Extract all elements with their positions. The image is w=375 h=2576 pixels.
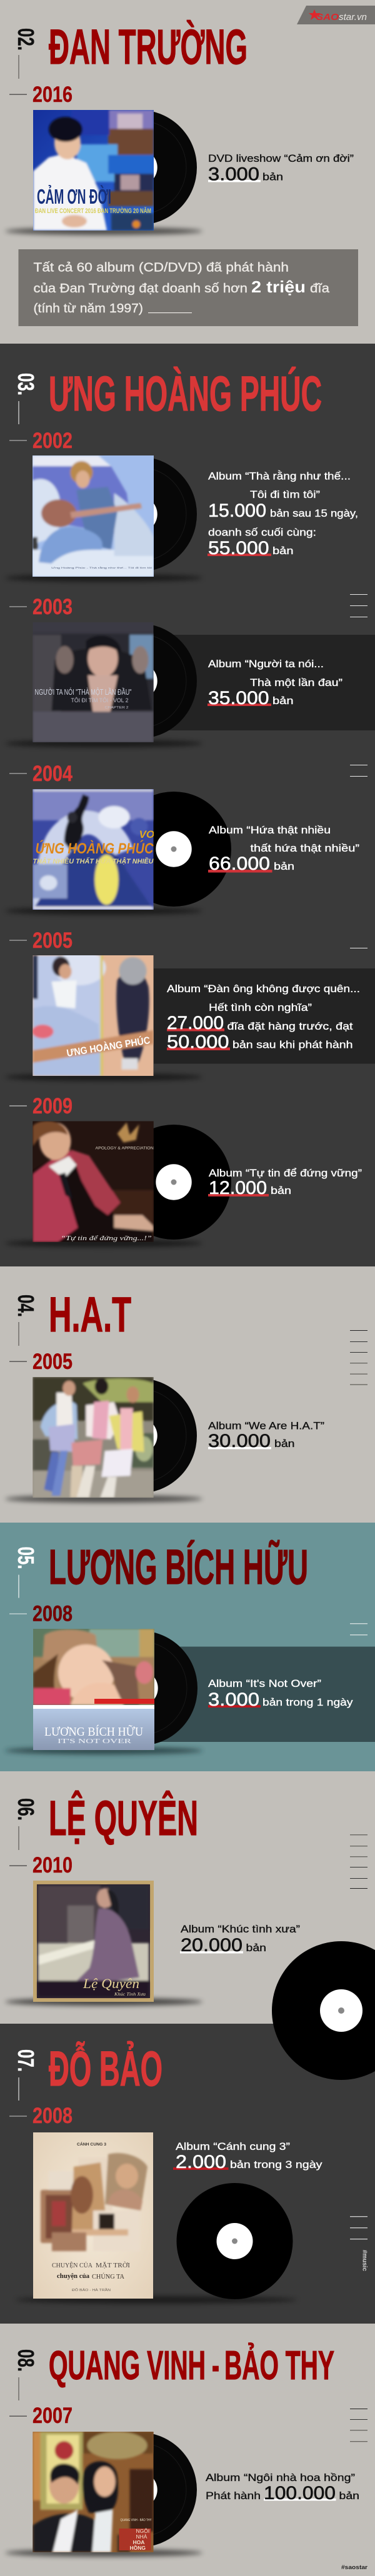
album cover: Khúc tình xưa: Lệ Quyên (82, 1976, 139, 1991)
logo: SaoStar: star.vn (339, 12, 367, 22)
album text: bản (272, 695, 294, 707)
year 2010: 2010 (32, 1853, 72, 1877)
album cover: Tự tin để đứng vững: “Tự tin để đứng vững...!” (61, 1235, 152, 1242)
album cover: Khúc tình xưa: Khúc Tình Xưa (114, 1992, 146, 1997)
hashtag #music: #music (361, 2250, 368, 2271)
album text: 15.000 (208, 500, 266, 521)
section background: Lệ Quyên (0, 1771, 375, 2024)
album cover: Ngôi nhà hoa hồng (32, 2432, 154, 2552)
album cover: Cảm ơn đời (33, 110, 154, 231)
album text: bản (274, 1438, 295, 1450)
vinyl disc (82, 624, 197, 738)
panel: Quang Vinh - Bảo Thy (5, 2342, 368, 2570)
album cover: Cánh cung 3 (33, 2132, 153, 2299)
shadow (5, 1495, 202, 1503)
panel: Lệ Quyên (5, 1790, 368, 2006)
Lệ Quyên vinyl disc (272, 1941, 375, 2080)
album cover: Thà rằng như thế (32, 455, 154, 577)
album cover: It's Not Over: IT'S NOT OVER (58, 1738, 132, 1745)
shadow (5, 907, 202, 915)
album text (208, 470, 358, 559)
album text: 100.000 (264, 2483, 336, 2504)
heading: QUANG VINH (49, 2342, 206, 2388)
year 2002: 2002 (32, 429, 72, 453)
year 2005: 2005 (32, 1350, 72, 1374)
vinyl disc (116, 792, 231, 907)
album text: Album “Ngôi nhà hoa hồng” (206, 2472, 355, 2484)
album text: Album “Thà rằng như thế... (208, 470, 351, 482)
album text (208, 152, 354, 185)
number 05: 05. (13, 1547, 39, 1569)
album text (208, 658, 342, 709)
album text: Album “Khúc tình xưa” (181, 1923, 300, 1935)
year 2008: 2008 (32, 1602, 72, 1626)
album text: bản (272, 545, 294, 557)
album text: bản (262, 171, 283, 182)
album text: bản (274, 860, 294, 872)
logo: SaoStar: SAO (316, 12, 339, 22)
shadow (5, 740, 202, 747)
number 03: 03. (13, 373, 39, 395)
callout: 60 albums: (tính từ năm 1997) (34, 302, 143, 316)
album cover: Ngôi nhà hoa hồng: NGÔI (136, 2528, 149, 2534)
album cover: It's Not Over: LƯƠNG BÍCH HỮU (44, 1724, 143, 1739)
album cover: Hứa thật nhiều: THẬT NHIỀU THẤT HỨA THẬT NHIỀU (32, 857, 154, 865)
shadow (5, 1747, 202, 1754)
album text: DVD liveshow “Cảm ơn đời” (208, 152, 354, 164)
album text: 12.000 (209, 1178, 267, 1198)
album text: Album “Hứa thật nhiều (209, 824, 331, 836)
album text: bản (271, 1185, 291, 1196)
shadow (5, 2549, 202, 2557)
album cover: Cánh cung 3: chuyện của (57, 2272, 89, 2280)
album text (208, 1167, 362, 1198)
year 2005: 2005 (32, 928, 72, 953)
album text: đĩa đặt hàng trước, đạt (228, 1020, 353, 1032)
number 08: 08. (13, 2349, 39, 2372)
album cover: Cánh cung 3: ĐỖ BẢO - HÀ TRẦN (72, 2288, 111, 2292)
vinyl disc (82, 2432, 197, 2547)
section background: Đỗ Bảo (0, 2024, 375, 2324)
album text: 3.000 (208, 1689, 259, 1710)
album text (208, 1678, 353, 1710)
callout: 60 albums: của Đan Trường đạt doanh số hơn (34, 282, 248, 296)
panel: Đan Trường (5, 19, 358, 326)
tick marks (350, 2216, 368, 2239)
year 2004: 2004 (32, 762, 72, 786)
album text (206, 2472, 359, 2504)
album cover: Cánh cung 3: CHUYỆN CỦA (52, 2262, 92, 2269)
album cover: Tự tin để đứng vững: APOLOGY & APPRECIATION (96, 1146, 154, 1151)
album text: 50.000 (167, 1032, 229, 1052)
album text (180, 1923, 300, 1956)
album cover: Người ta nói: TÔI ĐI TÌM TÔI - VOL 2 (71, 697, 129, 704)
album text: 2.000 (176, 2152, 226, 2172)
panel: Đỗ Bảo (9, 2041, 368, 2304)
vinyl disc (176, 2183, 292, 2299)
heading: ĐỖ BẢO (49, 2041, 162, 2096)
vinyl disc (116, 1125, 231, 1240)
album text: Album “Tự tin để đứng vững” (209, 1167, 362, 1179)
dark text panel 2003 (154, 635, 375, 730)
album text: 66.000 (209, 853, 270, 874)
shadow (5, 1073, 202, 1081)
album text (208, 1420, 324, 1451)
shadow (5, 1998, 202, 2006)
album cover: Cánh cung 3: CÁNH CUNG 3 (77, 2142, 107, 2147)
number 02: 02. (13, 28, 39, 51)
album text: Album “We Are H.A.T” (208, 1420, 324, 1432)
section background: Lương Bích Hữu (0, 1523, 375, 1771)
shadow (5, 227, 202, 235)
tick marks (350, 1834, 368, 1889)
album cover: Ngôi nhà hoa hồng: HOA (132, 2539, 144, 2545)
album cover: Ngôi nhà hoa hồng: NHÀ (136, 2534, 148, 2540)
album cover: Khúc tình xưa (33, 1881, 154, 2002)
tick marks (350, 1623, 368, 1635)
callout: 60 albums (19, 249, 358, 326)
callout: 60 albums: Tất cả 60 album (CD/DVD) đã phát hành (34, 261, 289, 275)
section background: H.A.T (0, 1266, 375, 1523)
hashtag #saostar: #saostar (341, 2564, 368, 2570)
album text: thất hứa thật nhiều” (250, 842, 359, 854)
shadow (5, 574, 202, 582)
album text: Album “Đàn ông không được quên... (167, 983, 360, 995)
callout: 60 albums: 2 triệu (251, 277, 306, 296)
album text: Tôi đi tìm tôi” (250, 489, 320, 500)
album cover: Ngôi nhà hoa hồng: HỒNG (130, 2544, 146, 2551)
album cover: Hứa thật nhiều: VOL (139, 828, 161, 840)
album text: Album “Cánh cung 3” (176, 2141, 290, 2152)
heading: H.A.T (49, 1286, 131, 1342)
album cover: It's Not Over (33, 1629, 154, 1750)
album cover: Cánh cung 3: MẶT TRỜI (96, 2262, 130, 2269)
album text: bản trong 1 ngày (262, 1696, 353, 1708)
album cover: Người ta nói: CHAPTER 2 (105, 706, 129, 710)
album text: 35.000 (208, 688, 269, 709)
panel: Lương Bích Hữu (5, 1539, 375, 1754)
album text: 55.000 (208, 538, 269, 559)
album text (208, 824, 359, 874)
album text: bản sau 15 ngày, (270, 507, 358, 519)
album text (167, 983, 360, 1052)
album text: bản sau khi phát hành (232, 1038, 352, 1051)
album cover: We Are H.A.T (32, 1377, 154, 1498)
album text: Album “It's Not Over” (208, 1678, 321, 1689)
vinyl disc (82, 110, 197, 225)
album text: 3.000 (208, 164, 259, 185)
album cover: Thà rằng như thế: Ưng Hoàng Phúc - Thà rằng như thế... Tôi đi tìm tôi (51, 566, 152, 569)
panel: Ưng Hoàng Phúc (5, 366, 375, 1247)
shadow (16, 2296, 297, 2304)
album text: 30.000 (208, 1431, 271, 1451)
callout: 60 albums: đĩa (310, 282, 330, 296)
panel: H.A.T (5, 1286, 368, 1503)
album text: doanh số cuối cùng: (208, 526, 316, 539)
album text (173, 2141, 322, 2172)
album cover: Tự tin để đứng vững (32, 1121, 154, 1242)
number 06: 06. (13, 1798, 39, 1821)
year 2007: 2007 (32, 2404, 72, 2428)
album text: bản (246, 1942, 266, 1954)
album text: Phát hành (206, 2490, 261, 2502)
album text: 20.000 (181, 1935, 242, 1956)
shadow (5, 1240, 202, 1247)
year 2016: 2016 (32, 82, 72, 107)
heading: - (212, 2342, 219, 2388)
album cover: Cánh cung 3: CHÚNG TA (92, 2273, 124, 2280)
heading: LỆ QUYÊN (49, 1790, 198, 1846)
album text: bản (339, 2490, 359, 2502)
tick marks (350, 594, 368, 948)
year 2008: 2008 (32, 2104, 72, 2128)
dark text panel 2008 (154, 1647, 375, 1742)
tick marks (350, 1330, 368, 1385)
logo: SaoStar (297, 6, 375, 24)
section background: Quang Vinh - Bảo Thy (0, 2324, 375, 2576)
album text: Hết tình còn nghĩa” (209, 1002, 312, 1013)
album text: 27.000 (167, 1013, 224, 1033)
vinyl disc (82, 1631, 198, 1746)
year 2009: 2009 (32, 1094, 72, 1118)
tick marks (350, 2409, 368, 2442)
number 04: 04. (13, 1295, 39, 1317)
section background: Đan Trường (0, 0, 375, 344)
number 07: 07. (13, 2049, 39, 2072)
section background: Ưng Hoàng Phúc (0, 344, 375, 1266)
vinyl disc (82, 457, 197, 572)
vinyl disc (82, 1378, 197, 1493)
album text: bản trong 3 ngày (230, 2159, 322, 2171)
album cover: Hứa thật nhiều (32, 789, 161, 910)
album cover: Người ta nói (32, 622, 154, 742)
dark text panel 2005 (154, 968, 375, 1063)
album text: Thà một lần đau” (250, 677, 342, 689)
album text: Album “Người ta nói... (208, 658, 324, 670)
album cover: Đàn ông không được quên (32, 955, 154, 1076)
year 2003: 2003 (32, 595, 72, 619)
